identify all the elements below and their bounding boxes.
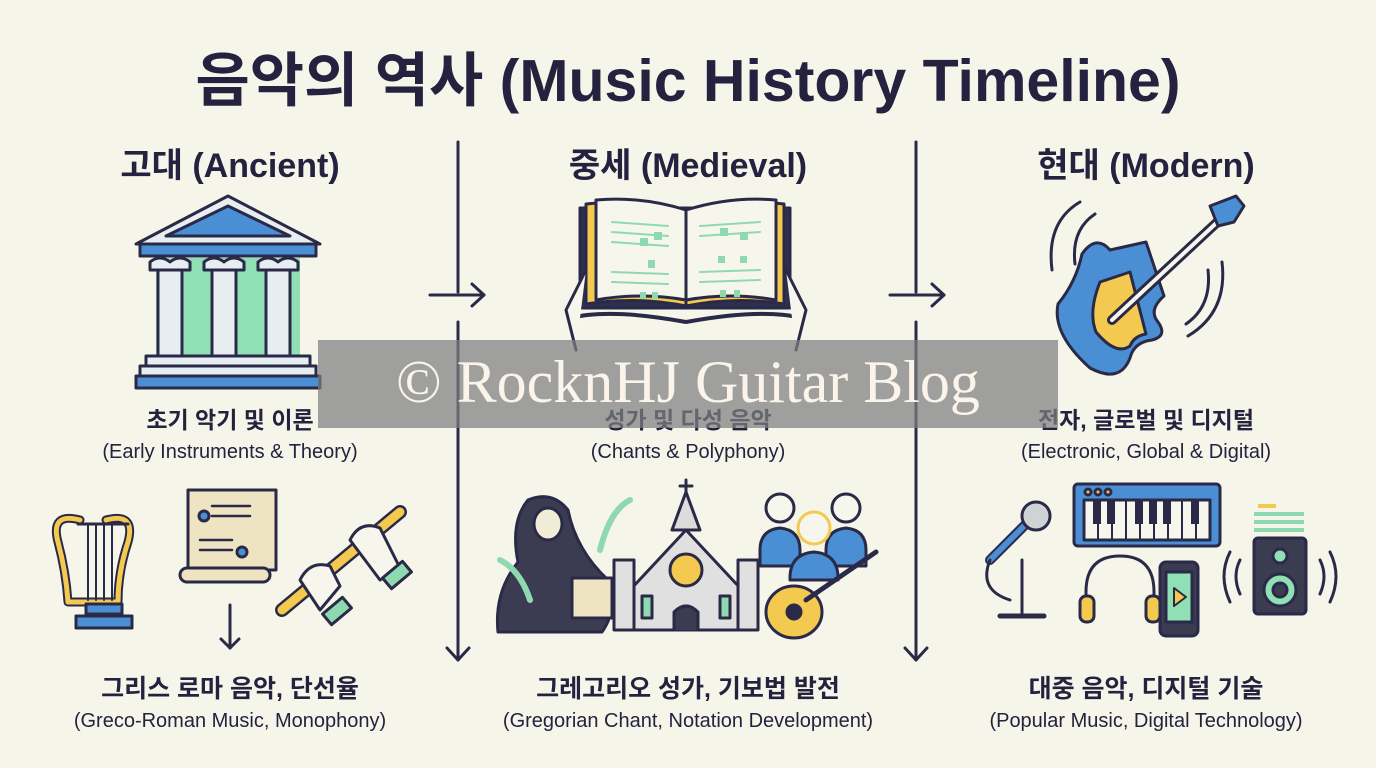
divider arrow 1: [447, 142, 469, 660]
title: 음악의 역사 (Music History Timeline): [195, 48, 1181, 114]
text: modern sub: 전자, 글로벌 및 디지털: [1038, 407, 1254, 433]
icon: phone: [1160, 562, 1198, 636]
heading: ancient: 고대 (Ancient): [120, 147, 340, 185]
text: medieval bottom: 그레고리오 성가, 기보법 발전: [536, 675, 840, 703]
icon: choir: [760, 494, 866, 580]
arrow right 2: [890, 284, 944, 306]
heading: medieval: 중세 (Medieval): [569, 147, 807, 185]
icon: speaker: [1224, 504, 1336, 614]
icon: flute with hands: [282, 512, 411, 625]
text: modern bottom: [989, 675, 1303, 732]
text: medieval bottom: [503, 675, 873, 732]
text: modern sub: (Electronic, Global & Digital): [1021, 441, 1271, 463]
text: ancient bottom: (Greco-Roman Music, Monophony): [74, 710, 386, 732]
heading: modern: 현대 (Modern): [1037, 147, 1255, 185]
text: modern bottom: (Popular Music, Digital Technology): [989, 710, 1303, 732]
text: medieval sub: (Chants & Polyphony): [591, 441, 785, 463]
icon: music scroll: [180, 490, 276, 582]
text: ancient sub: (Early Instruments & Theory): [102, 441, 358, 463]
icon: electric guitar: [1051, 196, 1244, 374]
icon: temple: [136, 196, 320, 388]
text: ancient sub: [102, 407, 358, 463]
icon: lute: [766, 552, 876, 638]
icon: open book with hands: [566, 199, 806, 350]
icon: microphone: [987, 502, 1050, 616]
icon: lyre: [56, 518, 132, 628]
arrow right 1: [430, 284, 484, 306]
icon: headphones: [1080, 556, 1160, 622]
text: modern sub: [1021, 407, 1271, 463]
arrow down small: [221, 605, 239, 648]
icon: monk: [497, 497, 630, 632]
icon: keyboard: [1074, 484, 1220, 546]
text: medieval sub: [591, 407, 785, 463]
watermark: [318, 340, 1058, 428]
text: ancient bottom: [74, 675, 386, 732]
text: ancient bottom: 그리스 로마 음악, 단선율: [101, 675, 359, 703]
text: medieval sub: 성가 및 다성 음악: [604, 407, 772, 433]
divider arrow 2: [905, 142, 927, 660]
text: medieval bottom: (Gregorian Chant, Notation Development): [503, 710, 873, 732]
text: modern bottom: 대중 음악, 디지털 기술: [1029, 675, 1263, 703]
watermark: © RocknHJ Guitar Blog: [396, 349, 980, 415]
text: ancient sub: 초기 악기 및 이론: [146, 407, 314, 433]
icon: cathedral: [614, 480, 758, 630]
